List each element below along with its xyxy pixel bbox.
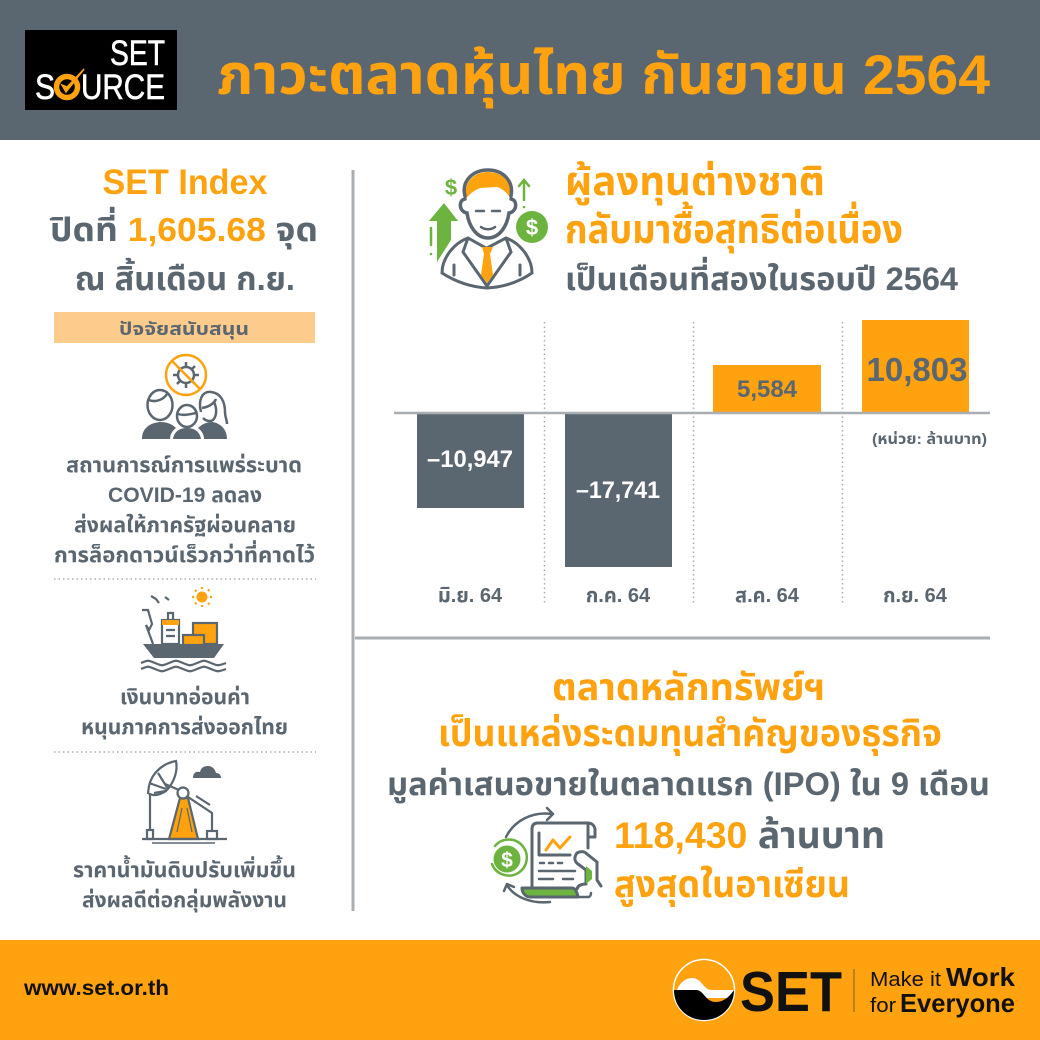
bar: July: –17,741 (576, 477, 660, 504)
factors label: ปัจจัยสนับสนุน (119, 319, 249, 340)
factor text: baht: หนุนภาคการส่งออกไทย (81, 716, 288, 740)
factor text: baht: เงินบาทอ่อนค่า (120, 686, 250, 709)
factors label (54, 312, 315, 343)
icon: investor with rising arrows: $ (526, 215, 538, 240)
bar: June: มิ.ย. 64 (438, 585, 503, 607)
logo: SET Source: URCE (81, 68, 165, 107)
bar: August: 5,584 (737, 376, 798, 403)
panel: SET Index summary (49, 163, 318, 297)
panel: foreign investors (394, 159, 990, 607)
bar chart: foreign net flows (394, 320, 990, 607)
slogan: Work (946, 962, 1016, 992)
slogan: Make it (870, 969, 941, 991)
icon: investor with rising arrows: $ (445, 175, 457, 200)
closing index value: ปิดที่ 1,605.68 จุด (49, 206, 318, 250)
title: ภาวะตลาดหุ้นไทย กันยายน 2564 (217, 43, 990, 109)
icon: oil pump (142, 761, 227, 843)
factor text: COVID-19: สถานการณ์การแพร่ระบาด (66, 454, 302, 477)
footer band (0, 940, 1040, 1040)
subheading: IPO value: มูลค่าเสนอขายในตลาดแรก (IPO) ใน 9 เดือน (387, 766, 990, 803)
bar: September: 10,803 (867, 351, 967, 388)
factor text: COVID-19: COVID-19 ลดลง (108, 484, 262, 507)
website: www.set.or.th (23, 977, 169, 1000)
icon: investor with rising arrows (429, 170, 548, 288)
slogan: for (870, 995, 896, 1017)
bar: August (713, 365, 821, 607)
header band (0, 0, 1040, 140)
bar: June (417, 413, 524, 607)
logo: SET (674, 960, 1016, 1024)
icon: report with coin (492, 808, 601, 902)
factor text: COVID-19: ส่งผลให้ภาครัฐผ่อนคลาย (74, 514, 296, 537)
factor text: crude oil (73, 855, 296, 913)
logo: SET: SET (740, 960, 842, 1024)
bar: September (862, 320, 969, 607)
factor text: COVID-19: การล็อกดาวน์เร็วกว่าที่คาดไว้ (54, 540, 315, 567)
slogan: Everyone (900, 988, 1015, 1018)
bar: September: ก.ย. 64 (883, 585, 948, 607)
factor text: COVID-19 (54, 454, 315, 567)
logo: SET Source: S (35, 68, 55, 107)
panel: IPO fundraising (387, 667, 990, 907)
icon: people and crossed-out virus (142, 355, 227, 439)
heading: fundraising source: เป็นแหล่งระดมทุนสำคัญของธุรกิจ (438, 713, 942, 756)
logo: SET Source (25, 30, 177, 110)
icon: report with coin: $ (501, 849, 513, 872)
factor text: crude oil: ราคาน้ำมันดิบปรับเพิ่มขึ้น (73, 855, 296, 882)
bar: June: –10,947 (427, 446, 513, 473)
bar: July (565, 413, 672, 607)
value: IPO amount: 118,430 ล้านบาท (614, 815, 885, 856)
logo: SET Source: SET (110, 34, 165, 73)
heading: foreign investors: ผู้ลงทุนต่างชาติ (565, 159, 825, 206)
heading: net buying: กลับมาซื้อสุทธิต่อเนื่อง (565, 201, 903, 254)
value: highest in ASEAN: สูงสุดในอาเซียน (614, 864, 850, 907)
heading: stock exchange: ตลาดหลักทรัพย์ฯ (552, 667, 825, 708)
subheading: เป็นเดือนที่สองในรอบปี 2564 (565, 256, 958, 297)
factor text: baht (81, 686, 288, 740)
heading: SET Index: SET Index (102, 163, 268, 202)
unit note: (หน่วย: ล้านบาท) (872, 430, 987, 448)
bar: July: ก.ค. 64 (586, 585, 651, 607)
icon: cargo ship and sun (141, 587, 226, 671)
slogan (870, 962, 1016, 1018)
factor text: crude oil: ส่งผลดีต่อกลุ่มพลังงาน (82, 889, 287, 913)
closing date: ณ สิ้นเดือน ก.ย. (75, 257, 295, 297)
panel: supporting factors (54, 312, 316, 913)
bar: August: ส.ค. 64 (735, 585, 800, 607)
